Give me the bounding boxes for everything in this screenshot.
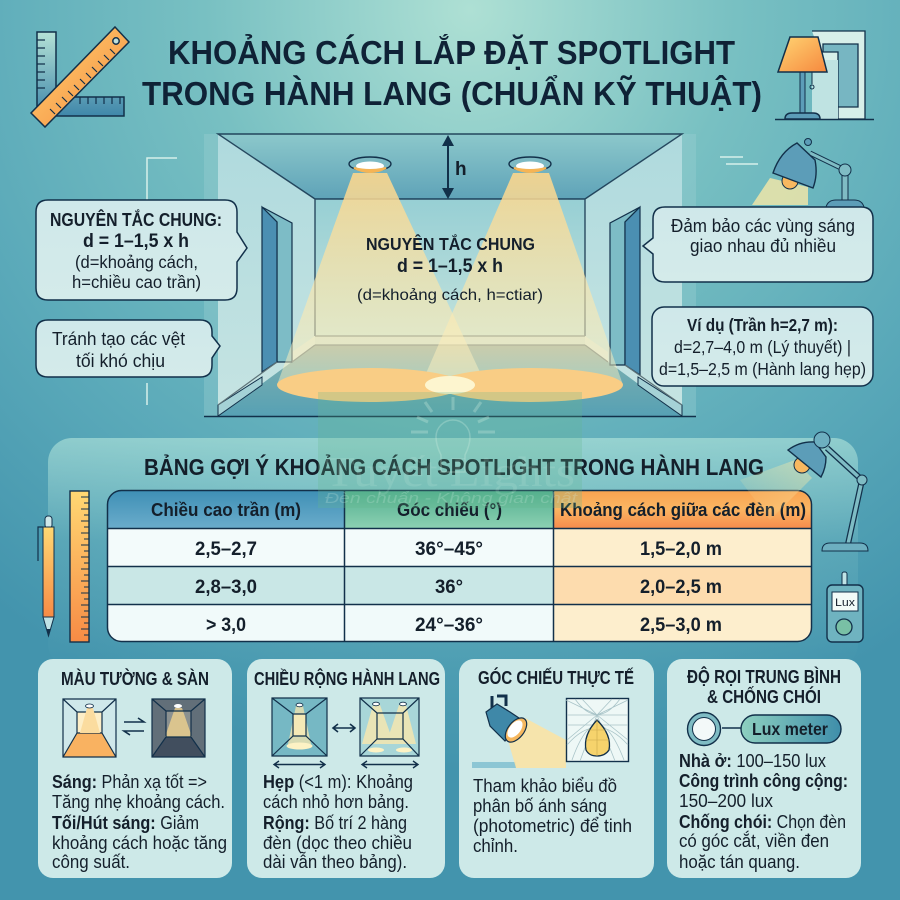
text: wall colour notes: khoảng cách hoặc tăng	[52, 833, 227, 853]
table row 2: 2,8–3,0	[195, 576, 257, 598]
light beam left	[277, 173, 486, 385]
callout: overlap: giao nhau đủ nhiều	[690, 236, 836, 256]
icon: floor bar	[472, 762, 516, 768]
callout: general rule: NGUYÊN TẮC CHUNG:	[50, 209, 222, 230]
icon: spotlight	[486, 696, 566, 768]
table row 3: 2,5–3,0 m	[640, 614, 722, 636]
text: wall colour notes: Tối/Hút sáng: Giảm	[52, 813, 199, 833]
panel: average illuminance and anti-glare	[667, 659, 861, 878]
text: corridor width notes: Hẹp (<1 m): Khoảng	[263, 772, 413, 792]
table row 1: 1,5–2,0 m	[640, 538, 722, 560]
watermark: Đèn chuẩn - Không gian chất	[325, 490, 578, 507]
icon: width arrows	[274, 761, 418, 768]
corridor illustration	[204, 134, 696, 416]
text: wall colour notes: Sáng: Phản xạ tốt =>	[52, 772, 207, 792]
icon: double arrow	[333, 724, 355, 732]
table: spotlight spacing suggestions	[107, 490, 812, 642]
text: corridor width notes: dài vẫn theo bảng).	[263, 851, 407, 872]
callout: general rule: (d=khoảng cách,	[75, 252, 198, 272]
icon: lux meter: Lux meter	[752, 719, 828, 739]
center formula text: NGUYÊN TẮC CHUNG	[366, 233, 535, 254]
panel: wall and floor colour	[38, 659, 232, 878]
text: corridor width notes: cách nhỏ hơn bảng.	[263, 792, 409, 812]
callout: example: d=2,7–4,0 m (Lý thuyết) |	[674, 337, 851, 357]
text: corridor width notes: Rộng: Bố trí 2 hàng	[263, 813, 407, 833]
panel: real beam angle: GÓC CHIẾU THỰC TẾ	[478, 667, 634, 688]
icon: lux meter device	[827, 572, 863, 642]
panel: average illuminance and anti-glare: ĐỘ RỌI TRUNG BÌNH	[687, 666, 841, 687]
icon: desk lamp table	[740, 432, 868, 551]
table row 1: 36°–45°	[415, 538, 483, 560]
table row 2: 36°	[435, 576, 463, 598]
text: illuminance notes: Nhà ở: 100–150 lux	[679, 751, 826, 771]
text: illuminance notes: hoặc tán quang.	[679, 852, 800, 872]
text: photometric note: Tham khảo biểu đồ	[473, 776, 617, 796]
table row 1	[195, 538, 722, 560]
table header: Khoảng cách giữa các đèn (m)	[560, 500, 806, 520]
callout: overlap: Đảm bảo các vùng sáng	[671, 216, 855, 236]
icon: swap arrows	[124, 718, 144, 735]
table row 1: 2,5–2,7	[195, 538, 257, 560]
icon: wide corridor	[360, 698, 419, 756]
text: illuminance notes: có góc cắt, viền đen	[679, 830, 829, 851]
table heading: BẢNG GỢI Ý KHOẢNG CÁCH SPOTLIGHT TRONG HÀNH LANG	[144, 452, 764, 480]
icon: dark room	[152, 699, 205, 757]
callout: overlap	[643, 207, 873, 282]
callout: example: Ví dụ (Trần h=2,7 m):	[687, 315, 838, 335]
icon: pencil	[38, 516, 54, 636]
text: wall colour notes	[52, 772, 227, 872]
callout: example	[652, 307, 873, 386]
callout: general rule: h=chiều cao trần)	[72, 272, 201, 292]
icon: desk lamp top right	[752, 138, 864, 207]
center formula text: d = 1–1,5 x h	[397, 256, 503, 277]
callout: general rule	[36, 200, 247, 300]
text: corridor width notes	[263, 772, 413, 872]
height arrow h: h	[455, 159, 467, 180]
text: photometric note: chỉnh.	[473, 836, 518, 856]
text: photometric note: phân bố ánh sáng	[473, 796, 607, 816]
title: TRONG HÀNH LANG (CHUẨN KỸ THUẬT)	[142, 75, 762, 112]
icon: vertical ruler	[70, 491, 89, 642]
icon: rulers	[31, 27, 129, 127]
table row 2: 2,0–2,5 m	[640, 576, 722, 598]
callout: general rule: d = 1–1,5 x h	[83, 231, 189, 252]
watermark: Tuyết Lights	[325, 450, 575, 496]
text: photometric note	[473, 776, 632, 856]
table header: Góc chiếu (°)	[397, 500, 502, 520]
callout: avoid dark spots: Tránh tạo các vệt	[52, 329, 185, 349]
center formula text: (d=khoảng cách, h=ctiar)	[357, 287, 543, 304]
panel: average illuminance and anti-glare: & CHỐNG CHÓI	[707, 686, 821, 707]
title: KHOẢNG CÁCH LẮP ĐẶT SPOTLIGHT	[168, 34, 735, 71]
text: illuminance notes: Công trình công cộng:	[679, 771, 848, 791]
table header	[151, 500, 806, 520]
panel: corridor width: CHIỀU RỘNG HÀNH LANG	[254, 668, 440, 689]
text: corridor width notes: đèn (dọc theo chiều	[263, 833, 412, 853]
table header: Chiều cao trần (m)	[151, 500, 301, 520]
watermark	[318, 392, 582, 508]
panel: table background	[48, 438, 858, 668]
text: wall colour notes: công suất.	[52, 852, 130, 872]
floor light pools	[277, 368, 623, 402]
callout: avoid dark spots: tối khó chịu	[76, 351, 165, 371]
ceiling spotlight right	[509, 157, 551, 172]
left door	[262, 207, 292, 372]
icon: narrow corridor	[272, 698, 327, 756]
right door	[610, 207, 640, 375]
light beam right	[421, 173, 623, 385]
icon: lux meter	[688, 712, 841, 746]
panel: real beam angle	[459, 659, 654, 878]
height arrow h	[442, 135, 467, 199]
table row 3	[206, 614, 722, 636]
callout: example: d=1,5–2,5 m (Hành lang hẹp)	[659, 359, 866, 379]
panel: wall and floor colour: MÀU TƯỜNG & SÀN	[61, 668, 209, 689]
text: wall colour notes: Tăng nhẹ khoảng cách.	[52, 792, 225, 812]
title	[142, 34, 762, 112]
ceiling spotlight left	[349, 157, 391, 172]
icon: photometric diagram	[566, 698, 628, 762]
icon: lux meter device: Lux	[835, 597, 856, 609]
table row 2	[195, 576, 722, 598]
text: photometric note: (photometric) để tinh	[473, 816, 632, 836]
callout: avoid dark spots	[36, 320, 220, 377]
icon: bright room	[63, 699, 116, 757]
table row 3: > 3,0	[206, 614, 246, 636]
decorative bracket strokes	[147, 157, 758, 405]
center formula text	[357, 233, 543, 304]
text: illuminance notes: 150–200 lux	[679, 791, 773, 811]
text: illuminance notes	[679, 751, 848, 872]
icon: floor lamp and door	[775, 31, 874, 120]
text: illuminance notes: Chống chói: Chọn đèn	[679, 812, 846, 832]
panel: corridor width	[247, 659, 445, 878]
table row 3: 24°–36°	[415, 614, 483, 636]
